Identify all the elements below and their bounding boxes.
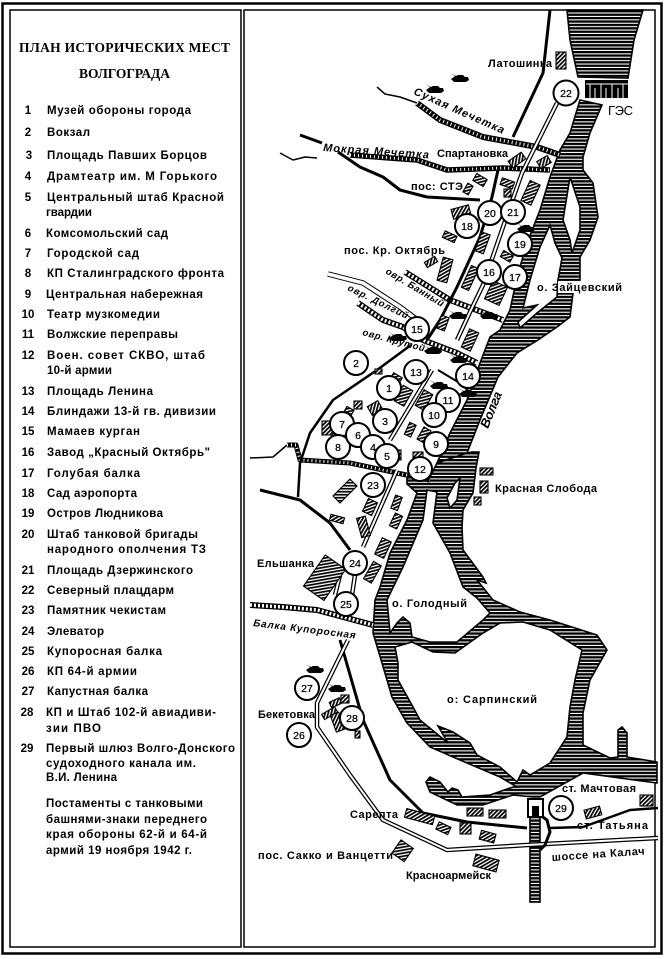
place labels: овр. Банный <box>383 266 446 310</box>
item 9: Центральная набережная <box>46 289 203 301</box>
item 7: Городской сад <box>47 248 140 260</box>
place labels: овр. Крутой <box>361 327 426 355</box>
item 2: Вокзал <box>47 127 90 139</box>
marker 6: 6 <box>355 430 361 442</box>
item 29: Первый шлюз Волго-Донского <box>46 743 235 755</box>
item 26: 26 <box>22 666 34 678</box>
marker 10 <box>422 403 446 427</box>
marker 13: 13 <box>410 367 422 379</box>
title: ПЛАН ИСТОРИЧЕСКИХ МЕСТ <box>19 40 230 55</box>
settlements <box>303 52 653 872</box>
tributaries and gullies <box>250 87 560 625</box>
item 24 <box>22 626 104 638</box>
item 6: Комсомольский сад <box>46 228 169 240</box>
marker 27 <box>295 676 319 700</box>
place labels: Красная Слобода <box>495 483 598 495</box>
item 25: 25 <box>22 646 35 658</box>
railways <box>260 10 658 828</box>
item 3: Площадь Павших Борцов <box>47 150 207 162</box>
note: tank pedestals: Постаменты с танковыми <box>46 798 203 810</box>
title <box>19 40 230 81</box>
marker 29 <box>549 796 573 820</box>
marker 19 <box>508 232 532 256</box>
item 29: судоходного канала им. <box>46 758 196 770</box>
place labels: Латошинка <box>488 58 553 70</box>
marker 7: 7 <box>339 419 345 431</box>
marker 24: 24 <box>349 558 361 570</box>
item 22: Северный плацдарм <box>47 585 174 597</box>
item 7: 7 <box>25 248 31 260</box>
item 19: Остров Людникова <box>47 508 164 520</box>
item 10: Театр музкомедии <box>47 309 160 321</box>
item 1: 1 <box>25 105 32 117</box>
numbered markers <box>287 80 578 820</box>
item 12: 12 <box>22 350 34 362</box>
marker 24 <box>343 551 367 575</box>
item 15: 15 <box>22 426 35 438</box>
note: tank pedestals: башнями-знаки переднего <box>46 814 207 826</box>
marker 1 <box>377 376 401 400</box>
marker 8 <box>326 435 350 459</box>
place labels: Ельшанка <box>257 558 315 570</box>
marker 11 <box>436 388 460 412</box>
marker 27: 27 <box>301 683 313 695</box>
marker 28 <box>340 706 364 730</box>
item 5: гвардии <box>46 207 92 219</box>
item 14: 14 <box>22 406 35 418</box>
marker 26 <box>287 723 311 747</box>
item 24: 24 <box>22 626 35 638</box>
place labels: Мокрая Мечетка <box>323 142 429 161</box>
item 5: 5 <box>25 192 32 204</box>
marker 14: 14 <box>462 371 474 383</box>
marker 15 <box>405 317 429 341</box>
item 12: 10-й армии <box>47 365 112 377</box>
place labels: Сарепта <box>350 809 399 821</box>
marker 12: 12 <box>414 464 426 476</box>
item 12 <box>22 350 205 377</box>
item 1: Музей обороны города <box>47 105 192 117</box>
item 28 <box>21 707 216 735</box>
islands <box>387 177 582 782</box>
marker 3: 3 <box>382 416 388 428</box>
panel: map <box>250 10 658 902</box>
marker 20 <box>478 201 502 225</box>
marker 25: 25 <box>340 599 352 611</box>
marker 29: 29 <box>555 803 567 815</box>
marker 21: 21 <box>507 207 519 219</box>
marker 3 <box>373 409 397 433</box>
item 6: 6 <box>25 228 31 240</box>
item 20: народного ополчения ТЗ <box>47 544 206 556</box>
marker 21 <box>501 200 525 224</box>
item 25: Купоросная балка <box>47 646 163 658</box>
item 11: 11 <box>22 329 35 341</box>
marker 10: 10 <box>428 410 440 422</box>
item 27: 27 <box>22 686 34 698</box>
marker 14 <box>456 364 480 388</box>
place labels <box>253 58 649 882</box>
item 13: 13 <box>22 386 34 398</box>
sluice 29 <box>528 799 543 817</box>
panel: legend <box>19 40 235 857</box>
place labels: Красноармейск <box>406 870 491 882</box>
title: ВОЛГОГРАДА <box>79 66 170 81</box>
item 17: 17 <box>22 468 34 480</box>
item 9: 9 <box>25 289 31 301</box>
marker 20: 20 <box>484 208 496 220</box>
marker 11: 11 <box>443 395 454 407</box>
place labels: Спартановка <box>437 148 509 160</box>
item 14: Блиндажи 13-й гв. дивизии <box>47 406 216 418</box>
item 29: В.И. Ленина <box>46 772 118 784</box>
item 18: 18 <box>22 488 35 500</box>
item 28: КП и Штаб 102-й авиадиви- <box>46 707 216 719</box>
marker 6 <box>346 423 370 447</box>
dam <box>585 80 628 98</box>
item 16: 16 <box>22 447 34 459</box>
item 15: Мамаев курган <box>47 426 140 438</box>
marker 1: 1 <box>386 383 392 395</box>
marker 2: 2 <box>353 358 359 370</box>
note: tank pedestals: края обороны 62-й и 64-й <box>46 829 207 841</box>
item 2 <box>25 127 90 139</box>
marker 19: 19 <box>514 239 526 251</box>
item 21: Площадь Дзержинского <box>47 565 193 577</box>
item 22: 22 <box>22 585 34 597</box>
note: tank pedestals: армий 19 ноября 1942 г. <box>46 845 192 857</box>
marker 22 <box>554 80 578 106</box>
place labels: Балка Купоросная <box>253 618 356 642</box>
marker 28: 28 <box>346 713 358 725</box>
marker 18 <box>455 214 479 238</box>
item 5 <box>25 192 224 219</box>
place labels: пос: СТЭ <box>411 181 463 193</box>
item 5: Центральный штаб Красной <box>47 192 224 204</box>
item 18: Сад аэропорта <box>47 488 138 500</box>
item 2: 2 <box>25 127 31 139</box>
item 10: 10 <box>22 309 34 321</box>
item 20: Штаб танковой бригады <box>47 529 198 541</box>
marker 26: 26 <box>293 730 305 742</box>
marker 16: 16 <box>483 267 495 279</box>
item 28: 28 <box>21 707 34 719</box>
place labels: ст. Татьяна <box>577 820 649 832</box>
place labels: о. Зайцевский <box>537 282 622 294</box>
marker 4 <box>361 435 385 459</box>
place labels: пос. Кр. Октябрь <box>344 245 445 257</box>
item 20: 20 <box>22 529 34 541</box>
marker 25 <box>334 592 358 616</box>
marker 22: 22 <box>560 88 572 100</box>
marker 17 <box>503 265 527 289</box>
place labels: о: Сарпинский <box>447 694 537 706</box>
marker 5: 5 <box>384 451 390 463</box>
item 3: 3 <box>26 150 32 162</box>
marker 15: 15 <box>411 324 423 336</box>
marker 16 <box>477 260 501 284</box>
item 29 <box>21 743 235 784</box>
marker 17: 17 <box>509 272 521 284</box>
marker 5 <box>375 444 399 468</box>
marker 4: 4 <box>370 442 376 454</box>
place labels: Сухая Мечетка <box>412 86 506 137</box>
legend list <box>21 105 235 857</box>
marker 8: 8 <box>335 442 341 454</box>
place labels: ст. Мачтовая <box>562 783 636 795</box>
place labels: Волга <box>477 389 505 430</box>
item 28: зии ПВО <box>46 723 101 735</box>
item 26: КП 64-й армии <box>47 666 137 678</box>
item 27: Капустная балка <box>47 686 149 698</box>
place labels: о. Голодный <box>392 598 467 610</box>
label backing: Zaitsevsky <box>558 281 624 293</box>
place labels: пос. Сакко и Ванцетти <box>258 850 393 862</box>
item 13: Площадь Ленина <box>47 386 154 398</box>
roads <box>317 103 658 850</box>
place labels: Бекетовка <box>258 709 316 721</box>
item 8: КП Сталинградского фронта <box>47 268 225 280</box>
item 23: 23 <box>22 605 34 617</box>
item 8: 8 <box>25 268 32 280</box>
item 4: 4 <box>25 171 32 183</box>
place labels: ГЭС <box>608 103 633 118</box>
item 24: Элеватор <box>47 626 104 638</box>
item 21: 21 <box>22 565 35 577</box>
item 29: 29 <box>21 743 33 755</box>
item 23: Памятник чекистам <box>47 605 166 617</box>
item 16: Завод „Красный Октябрь" <box>47 447 210 459</box>
marker 9 <box>424 432 448 456</box>
tank pedestals <box>305 73 535 692</box>
note: tank pedestals <box>46 798 207 857</box>
marker 23: 23 <box>367 480 379 492</box>
place labels: овр. Долгий <box>346 283 410 322</box>
marker 9: 9 <box>433 439 439 451</box>
place labels: шоссе на Калач <box>551 846 645 864</box>
item 4: Драмтеатр им. М Горького <box>47 171 217 183</box>
marker 2 <box>344 351 368 375</box>
marker 12 <box>408 457 432 481</box>
marker 13 <box>404 360 428 384</box>
item 12: Воен. совет СКВО, штаб <box>47 350 205 362</box>
item 20 <box>22 529 206 556</box>
marker 23 <box>361 473 385 497</box>
item 11: Волжские переправы <box>47 329 178 341</box>
item 19: 19 <box>22 508 34 520</box>
item 17: Голубая балка <box>47 468 141 480</box>
marker 7 <box>330 412 354 436</box>
river Volga <box>373 10 657 902</box>
marker 18: 18 <box>461 221 473 233</box>
